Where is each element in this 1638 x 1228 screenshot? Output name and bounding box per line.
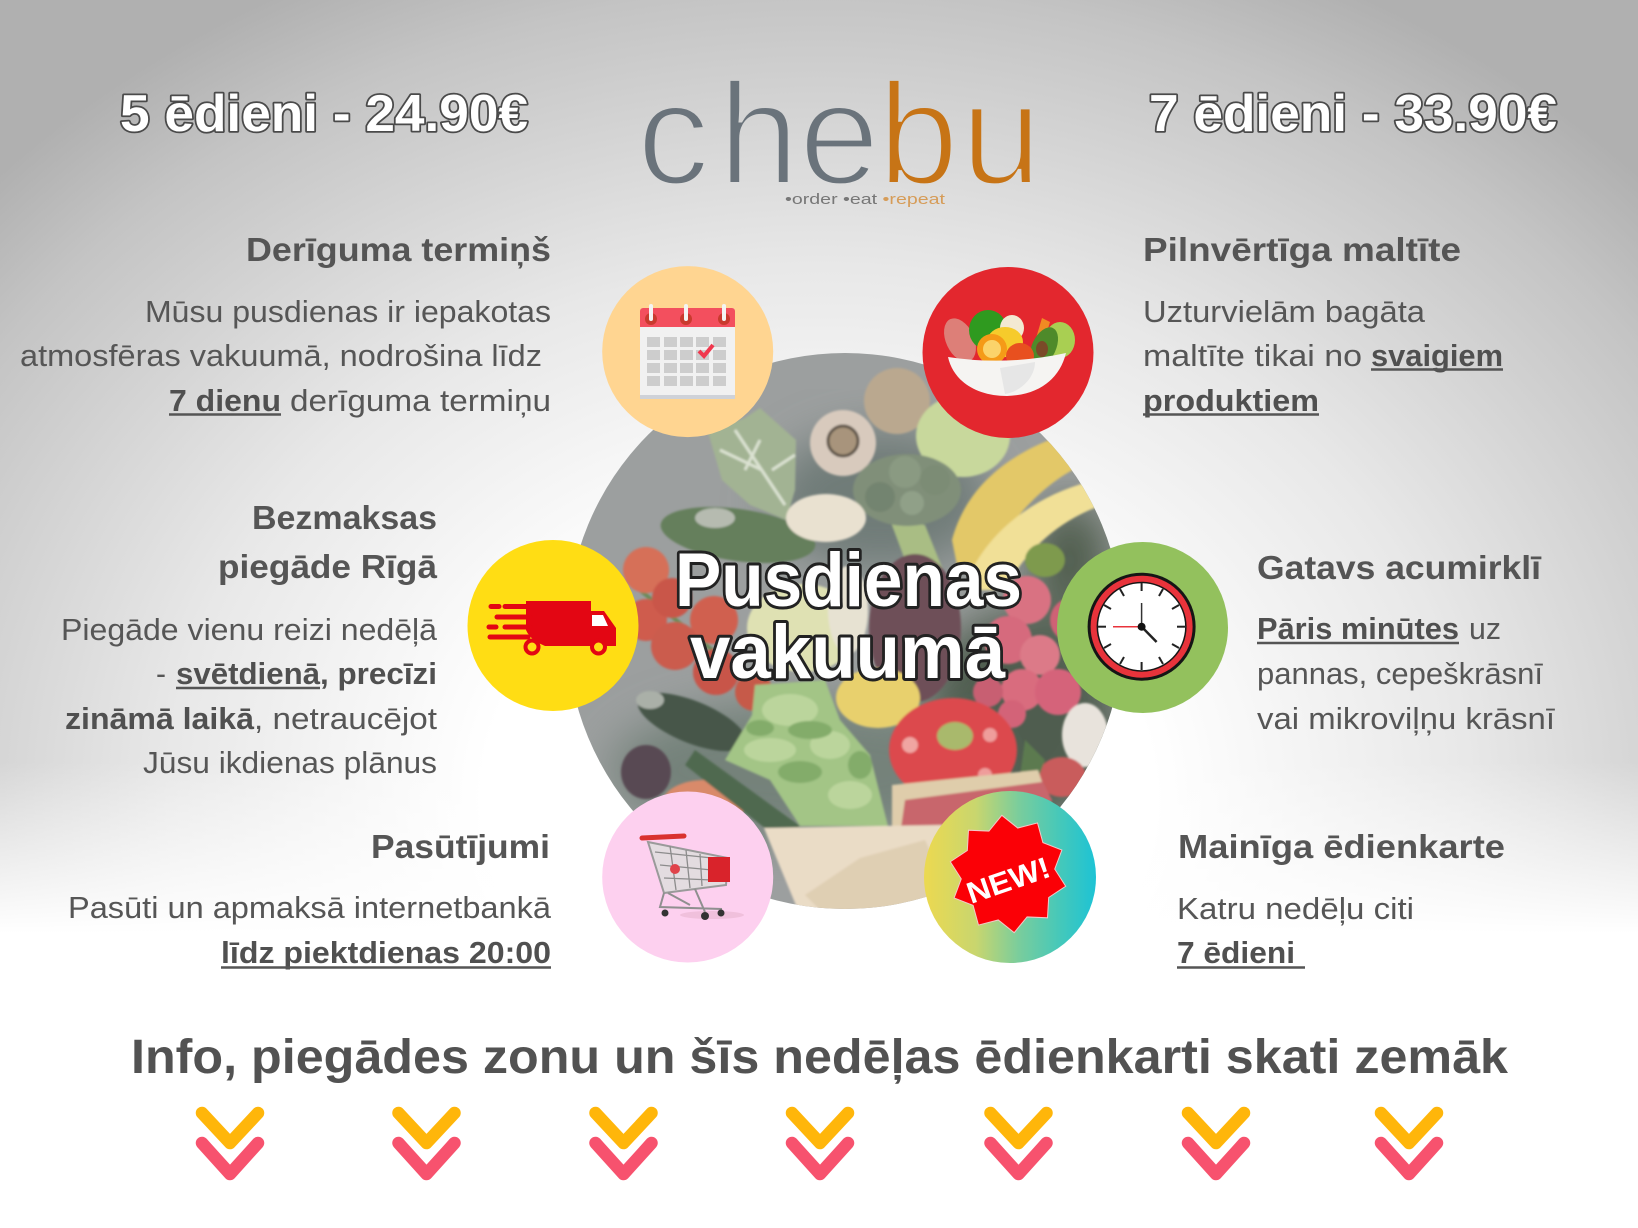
paper bag xyxy=(900,781,1053,827)
broccoli xyxy=(891,524,942,568)
roots, dark green xyxy=(660,506,816,564)
text block: Pāris minūtes xyxy=(1257,612,1459,646)
arrow 3 xyxy=(596,1113,652,1174)
text block: Pasūti un apmaksā internetbankā xyxy=(68,891,551,925)
icon: calendar xyxy=(602,266,773,437)
logo: chebu: che xyxy=(637,53,880,215)
heading: Bezmaksas xyxy=(252,499,437,536)
icon: NEW badge: NEW! xyxy=(963,851,1055,911)
heading xyxy=(218,499,438,585)
arrow 1 xyxy=(202,1113,258,1174)
food photo circle xyxy=(560,350,1130,915)
logo: chebu xyxy=(645,80,1030,207)
heading: Mainīga ēdienkarte xyxy=(1178,828,1505,865)
text block: Katru nedēļu citi xyxy=(1177,892,1414,926)
icon: delivery truck xyxy=(468,540,638,711)
text block xyxy=(61,613,438,780)
text block: svaigiem xyxy=(1371,339,1503,373)
panel: full meal xyxy=(1143,231,1503,418)
icon: salad bowl xyxy=(922,267,1094,438)
heading: Pasūtījumi xyxy=(371,828,550,865)
text block: Jūsu ikdienas plānus xyxy=(143,746,437,780)
text block: pannas, cepeškrāsnī xyxy=(1257,657,1544,691)
logo: chebu: •order •eat •repeat xyxy=(785,192,945,208)
text block: Mūsu pusdienas ir iepakotas xyxy=(145,295,551,329)
text block: zināmā laikā xyxy=(65,702,255,736)
heading: bottom call to action: Info, piegādes zonu un šīs nedēļas ēdienkarti skati zemāk xyxy=(131,1031,1508,1084)
text block: uz xyxy=(1469,612,1501,646)
text block xyxy=(1177,892,1414,970)
title: Pusdienas vakuumā: vakuumā xyxy=(690,610,1006,695)
arrow 7 xyxy=(1381,1113,1437,1174)
tomatoes xyxy=(640,592,714,651)
radishes xyxy=(1003,576,1051,624)
heading: Gatavs acumirklī xyxy=(1257,549,1542,586)
arrow 4 xyxy=(792,1113,848,1174)
cabbage, eggplant xyxy=(746,583,838,672)
price: 5 meals: 5 ēdieni - 24.90€ xyxy=(120,85,528,143)
lemon xyxy=(836,668,920,728)
icon: NEW badge xyxy=(924,791,1096,963)
icon: shopping cart xyxy=(602,792,773,962)
logo: chebu: bu xyxy=(878,53,1042,215)
bananas xyxy=(950,440,1072,565)
text block: Piegāde vienu reizi nedēļā xyxy=(61,613,437,647)
text block: Uzturvielām bagāta xyxy=(1143,295,1425,329)
heading: Derīguma termiņš xyxy=(246,231,551,268)
title: Pusdienas vakuumā: Pusdienas xyxy=(675,538,1022,623)
text block xyxy=(1143,295,1503,418)
arrow 2 xyxy=(398,1113,454,1174)
text block: , netraucējot xyxy=(254,702,438,736)
text block xyxy=(1257,612,1556,736)
text block: - xyxy=(156,657,166,691)
title: Pusdienas vakuumā xyxy=(675,538,1022,695)
text block: līdz piektdienas 20:00 xyxy=(221,936,551,970)
text block xyxy=(20,295,551,418)
arrow 6 xyxy=(1188,1113,1244,1174)
heading: piegāde Rīgā xyxy=(218,548,438,585)
text block: maltīte tikai no xyxy=(1143,339,1362,373)
price: 7 meals: 7 ēdieni - 33.90€ xyxy=(1149,85,1557,143)
text block: vai mikroviļņu krāsnī xyxy=(1257,702,1556,736)
icon row: chevron arrows xyxy=(202,1113,1437,1174)
zucchini, onion xyxy=(637,692,743,752)
garlic, berries xyxy=(1062,703,1108,767)
heading: Pilnvērtīga maltīte xyxy=(1143,231,1461,268)
panel: changing menu xyxy=(1177,828,1505,970)
lettuce xyxy=(725,680,888,826)
text block: svētdienā xyxy=(176,657,321,691)
arrow 5 xyxy=(990,1113,1046,1174)
text block: 7 ēdieni xyxy=(1177,936,1295,970)
panel: orders xyxy=(68,828,551,970)
text block: atmosfēras vakuumā, nodrošina līdz xyxy=(20,339,542,373)
text block: derīguma termiņu xyxy=(290,384,551,418)
text block: , precīzi xyxy=(320,657,437,691)
text block: produktiem xyxy=(1143,384,1319,418)
text block xyxy=(68,891,551,970)
panel: shelf life xyxy=(20,231,551,418)
text block: 7 dienu xyxy=(169,384,281,418)
icon: clock xyxy=(1057,542,1228,713)
pepper xyxy=(888,696,1018,785)
panel: free delivery xyxy=(61,499,438,780)
panel: ready in a moment xyxy=(1257,549,1556,736)
kale, potato, mushroom, apple xyxy=(708,408,796,520)
